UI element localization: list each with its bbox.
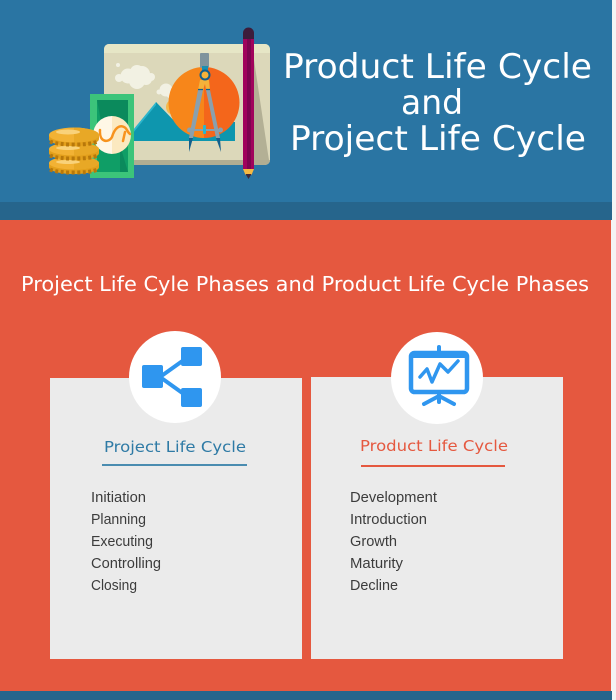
icon: presentation board xyxy=(391,332,483,424)
heading underline xyxy=(102,464,247,466)
panel heading: Project Life Cycle xyxy=(104,438,246,456)
phase list: Executing xyxy=(91,533,153,550)
panel background xyxy=(311,377,563,659)
phase list: Initiation xyxy=(91,489,146,506)
title: Project Life Cycle xyxy=(290,119,586,159)
title: and xyxy=(401,83,463,123)
icon: pencil xyxy=(243,28,254,179)
icon: share nodes xyxy=(129,331,221,423)
phase list: Decline xyxy=(350,577,398,594)
panel background xyxy=(50,378,302,659)
icon: banknote xyxy=(90,94,134,178)
phase list: Growth xyxy=(350,533,397,550)
main orange panel xyxy=(0,220,611,691)
icon: compass xyxy=(187,53,223,152)
heading underline xyxy=(361,465,505,467)
panel: product life cycle xyxy=(311,332,563,659)
panel: project life cycle xyxy=(50,331,302,659)
phase list: Closing xyxy=(91,577,137,594)
header band xyxy=(0,0,612,220)
illustration: drawing board, compass, pencil, money xyxy=(49,28,270,179)
footer band xyxy=(0,691,612,700)
phase list: Controlling xyxy=(91,555,161,572)
section heading: Project Life Cyle Phases and Product Life Cycle Phases xyxy=(21,272,589,296)
phase list: Planning xyxy=(91,511,146,528)
title xyxy=(283,47,592,159)
phase list: Introduction xyxy=(350,511,427,528)
title: Product Life Cycle xyxy=(283,47,592,87)
icon: mountains and sun xyxy=(133,67,239,141)
icon: drawing board xyxy=(104,44,270,165)
phase list: Development xyxy=(350,489,438,506)
phase list: Maturity xyxy=(350,555,403,572)
phase list xyxy=(350,489,438,594)
phase list xyxy=(91,489,161,594)
panel heading: Product Life Cycle xyxy=(360,437,508,455)
icon: coin stack xyxy=(49,128,99,174)
